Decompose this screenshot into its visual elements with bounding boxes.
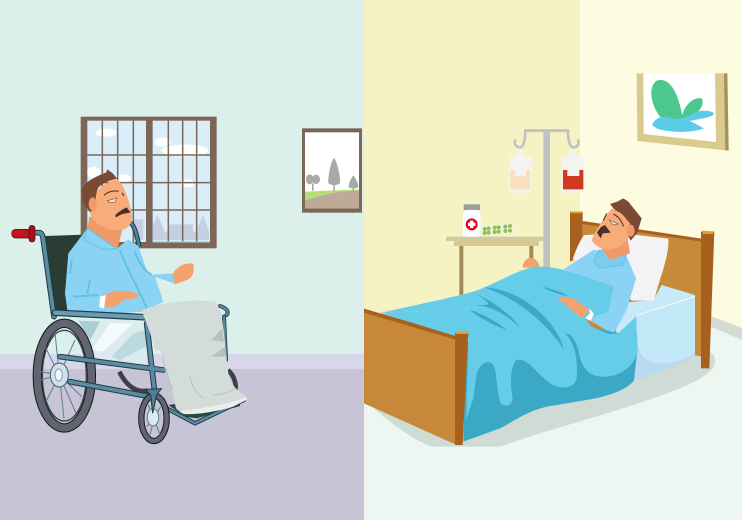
hospital bed with man <box>364 198 715 447</box>
panel: left room <box>0 0 364 520</box>
bag: red fluid <box>562 149 585 193</box>
window <box>81 117 217 248</box>
pole and hooks <box>515 130 578 273</box>
wheelchair back wheels and backrest <box>45 223 236 391</box>
IV drip stand with bags <box>509 130 585 273</box>
pill blister <box>482 223 513 236</box>
footboard <box>364 309 457 445</box>
lap blanket <box>142 301 247 414</box>
man on bed <box>563 198 642 334</box>
foot post <box>455 331 468 445</box>
panel: right room <box>364 0 742 520</box>
large wheel <box>37 323 91 428</box>
medicine bottle <box>463 204 481 237</box>
mattress <box>613 285 695 381</box>
man shirt <box>65 228 175 317</box>
wheel hub <box>50 363 68 387</box>
headboard <box>570 212 714 368</box>
footrest <box>167 395 245 423</box>
seat cushion <box>72 320 147 367</box>
man hand and fist <box>99 263 194 308</box>
bedside table with medicine <box>446 204 544 295</box>
fist behind blanket <box>522 258 539 268</box>
wheelchair frame tubes <box>33 233 228 397</box>
picture: abstract green plant on water <box>637 73 729 151</box>
bed floor shadow <box>364 351 715 447</box>
blanket <box>382 267 637 442</box>
handle <box>12 225 35 242</box>
bag: pale fluid <box>509 149 532 193</box>
wheelchair and seated man <box>12 169 247 441</box>
table <box>446 237 544 295</box>
pillow <box>573 233 668 301</box>
armrest <box>55 313 159 326</box>
man neck and head <box>82 169 132 249</box>
small front wheel <box>141 389 167 441</box>
picture: landscape with trees <box>302 128 362 213</box>
